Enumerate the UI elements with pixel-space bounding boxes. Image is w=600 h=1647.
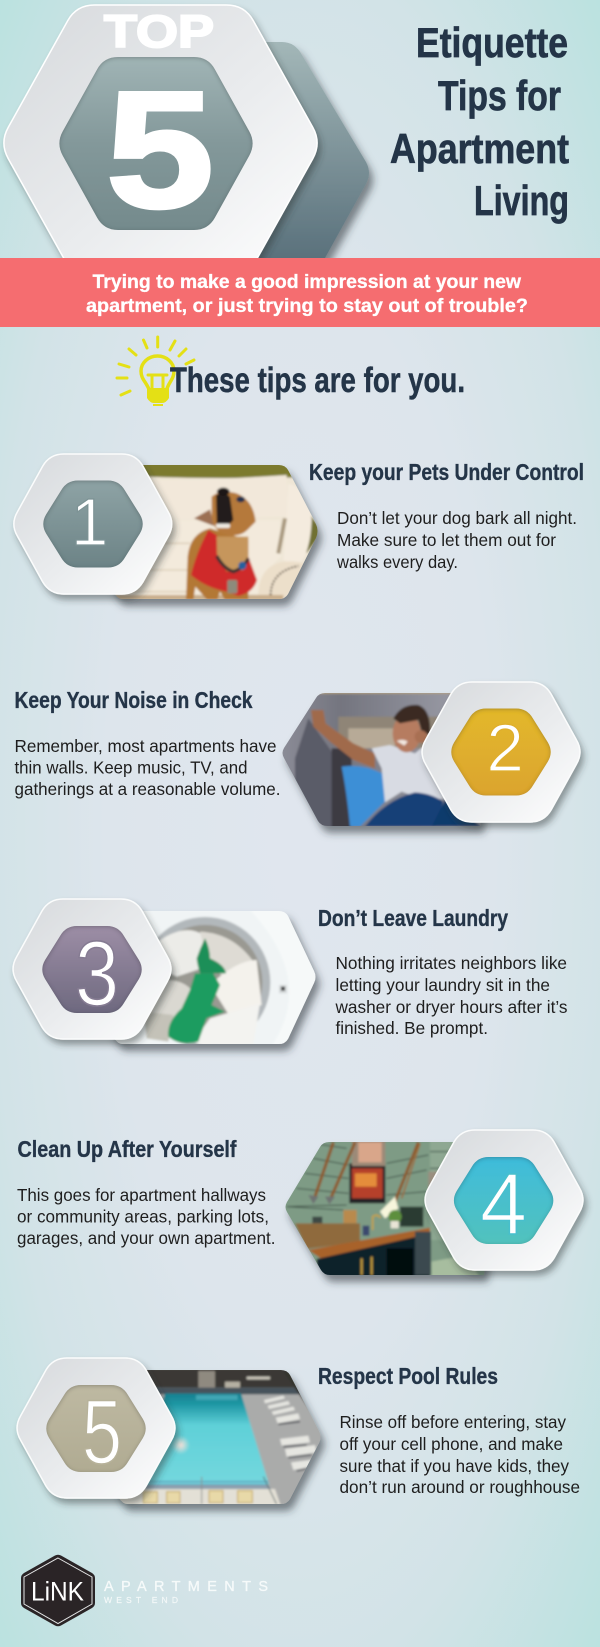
coral banner: Trying to make a good impression at your new <box>92 272 521 293</box>
coral banner: apartment, or just trying to stay out of trouble? <box>86 296 528 317</box>
body text: Remember, most apartments have <box>14 736 276 756</box>
body text: off your cell phone, and make <box>340 1434 563 1454</box>
coral banner <box>0 258 600 327</box>
inner hexagon <box>454 1157 553 1244</box>
heading: Clean Up After Yourself <box>18 1136 237 1162</box>
title: Tips for <box>438 72 561 119</box>
photo: pool from above <box>116 1370 330 1516</box>
body text: finished. Be prompt. <box>336 1018 488 1038</box>
tip 2 panel <box>14 682 580 830</box>
tip 5 panel <box>17 1358 580 1508</box>
title: Apartment <box>390 125 569 172</box>
badge hexagon <box>13 899 171 1039</box>
inner hexagon <box>46 1385 146 1472</box>
body text <box>335 953 568 1038</box>
body text: garages, and your own apartment. <box>17 1228 276 1248</box>
body text: washer or dryer hours after it’s <box>335 997 568 1017</box>
body text <box>340 1412 580 1497</box>
inner hexagon <box>451 708 551 796</box>
back hexagon <box>230 42 369 258</box>
body text: This goes for apartment hallways <box>17 1185 266 1205</box>
number 5: 5 <box>82 1382 122 1483</box>
inner hexagon <box>59 57 253 230</box>
logo text: west end: WEST END <box>104 1595 178 1605</box>
body text: Rinse off before entering, stay <box>340 1412 566 1432</box>
body text: don’t run around or roughhouse <box>340 1477 580 1497</box>
inner hexagon <box>43 480 143 568</box>
body text: thin walls. Keep music, TV, and <box>14 758 248 778</box>
subheading: These tips are for you. <box>170 361 465 400</box>
body text: walks every day. <box>336 552 458 572</box>
tip 3 panel <box>13 899 568 1048</box>
logo wordmark: LiNK <box>31 1576 84 1606</box>
badge hexagon <box>422 682 580 822</box>
body text: gatherings at a reasonable volume. <box>14 779 280 799</box>
photo: laundry in washer <box>111 911 324 1056</box>
logo hexagon <box>21 1555 95 1626</box>
inner hexagon <box>42 926 142 1013</box>
numeral: 5: 5 <box>106 58 214 243</box>
number 2: 2 <box>486 711 524 786</box>
word: top: TOP <box>104 6 214 57</box>
body text: sure that if you have kids, they <box>340 1456 569 1476</box>
body text: or community areas, parking lots, <box>17 1206 269 1226</box>
body text <box>336 508 577 572</box>
number 4: 4 <box>480 1156 527 1253</box>
badge hexagon <box>17 1358 175 1498</box>
photo: man covering ear <box>275 690 495 830</box>
badge hexagon <box>14 454 172 594</box>
number 3: 3 <box>75 923 119 1025</box>
photo: tidy kitchenette <box>280 1140 500 1280</box>
header graphic: top 5 badge <box>4 5 369 281</box>
heading: Don’t Leave Laundry <box>318 905 508 931</box>
number 1: 1 <box>71 485 108 560</box>
body text <box>14 736 280 799</box>
logo text: apartments: APARTMENTS <box>104 1579 268 1595</box>
icon: lightbulb <box>117 337 194 406</box>
tip 1 panel <box>14 454 584 603</box>
tip 4 panel <box>17 1130 583 1280</box>
body text: Don’t let your dog bark all night. <box>337 508 577 528</box>
body text: Nothing irritates neighbors like <box>336 953 567 973</box>
heading: Respect Pool Rules <box>318 1363 498 1389</box>
logo: Link Apartments West End <box>21 1555 268 1626</box>
logo inner outline <box>24 1558 92 1624</box>
body text: letting your laundry sit in the <box>336 975 550 995</box>
title <box>390 19 569 224</box>
title: Etiquette <box>416 19 568 66</box>
badge hexagon <box>425 1130 583 1270</box>
body text: Make sure to let them out for <box>337 530 556 550</box>
photo: barking dog <box>111 465 326 612</box>
front hexagon <box>4 5 317 281</box>
heading: Keep Your Noise in Check <box>14 687 253 713</box>
body text <box>17 1185 276 1248</box>
title: Living <box>474 177 569 224</box>
